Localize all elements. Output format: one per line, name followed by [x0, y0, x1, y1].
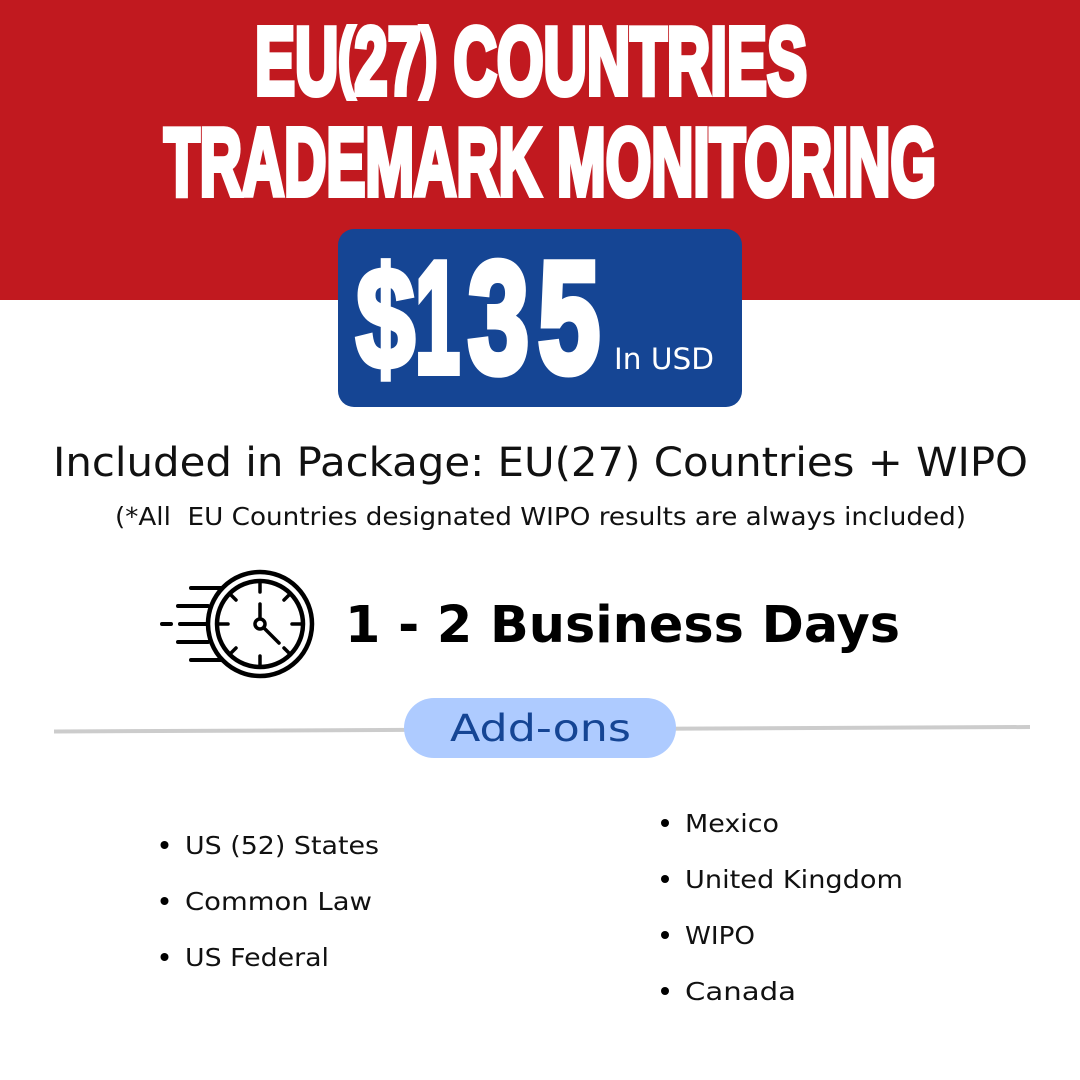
- list item: Canada: [685, 977, 796, 1006]
- price box: [338, 229, 742, 407]
- add-ons list: left: [160, 831, 379, 972]
- price: $: [356, 238, 415, 399]
- package heading: Included in Package: EU(27) Countries + WIPO: [53, 440, 1028, 486]
- title line 1: ): [421, 14, 437, 99]
- price unit: In USD: [614, 342, 714, 376]
- title line 1: COUNTRIES: [437, 8, 807, 115]
- list item: United Kingdom: [685, 865, 903, 894]
- list item: Common Law: [185, 887, 372, 916]
- list item: Mexico: [685, 809, 779, 838]
- package note: (*All EU Countries designated WIPO results are always included): [115, 502, 966, 531]
- title line 1: EU: [255, 8, 388, 115]
- header band: [0, 0, 1080, 300]
- delivery time: 1 - 2 Business Days: [345, 596, 900, 655]
- add-ons pill: [404, 698, 676, 758]
- price: 3: [468, 230, 529, 406]
- list item: US (52) States: [185, 831, 379, 860]
- add-ons label: Add-ons: [450, 707, 631, 750]
- title: [164, 8, 936, 216]
- price: [356, 230, 600, 406]
- divider line: [54, 727, 1030, 732]
- icon: fast clock: [162, 572, 312, 676]
- add-ons list: right: [661, 809, 903, 1006]
- title line 1: (: [338, 14, 355, 99]
- list item: US Federal: [185, 943, 329, 972]
- price: 5: [538, 230, 600, 406]
- title line 1: 27: [354, 8, 421, 115]
- price: 1: [415, 230, 460, 406]
- list item: WIPO: [685, 921, 755, 950]
